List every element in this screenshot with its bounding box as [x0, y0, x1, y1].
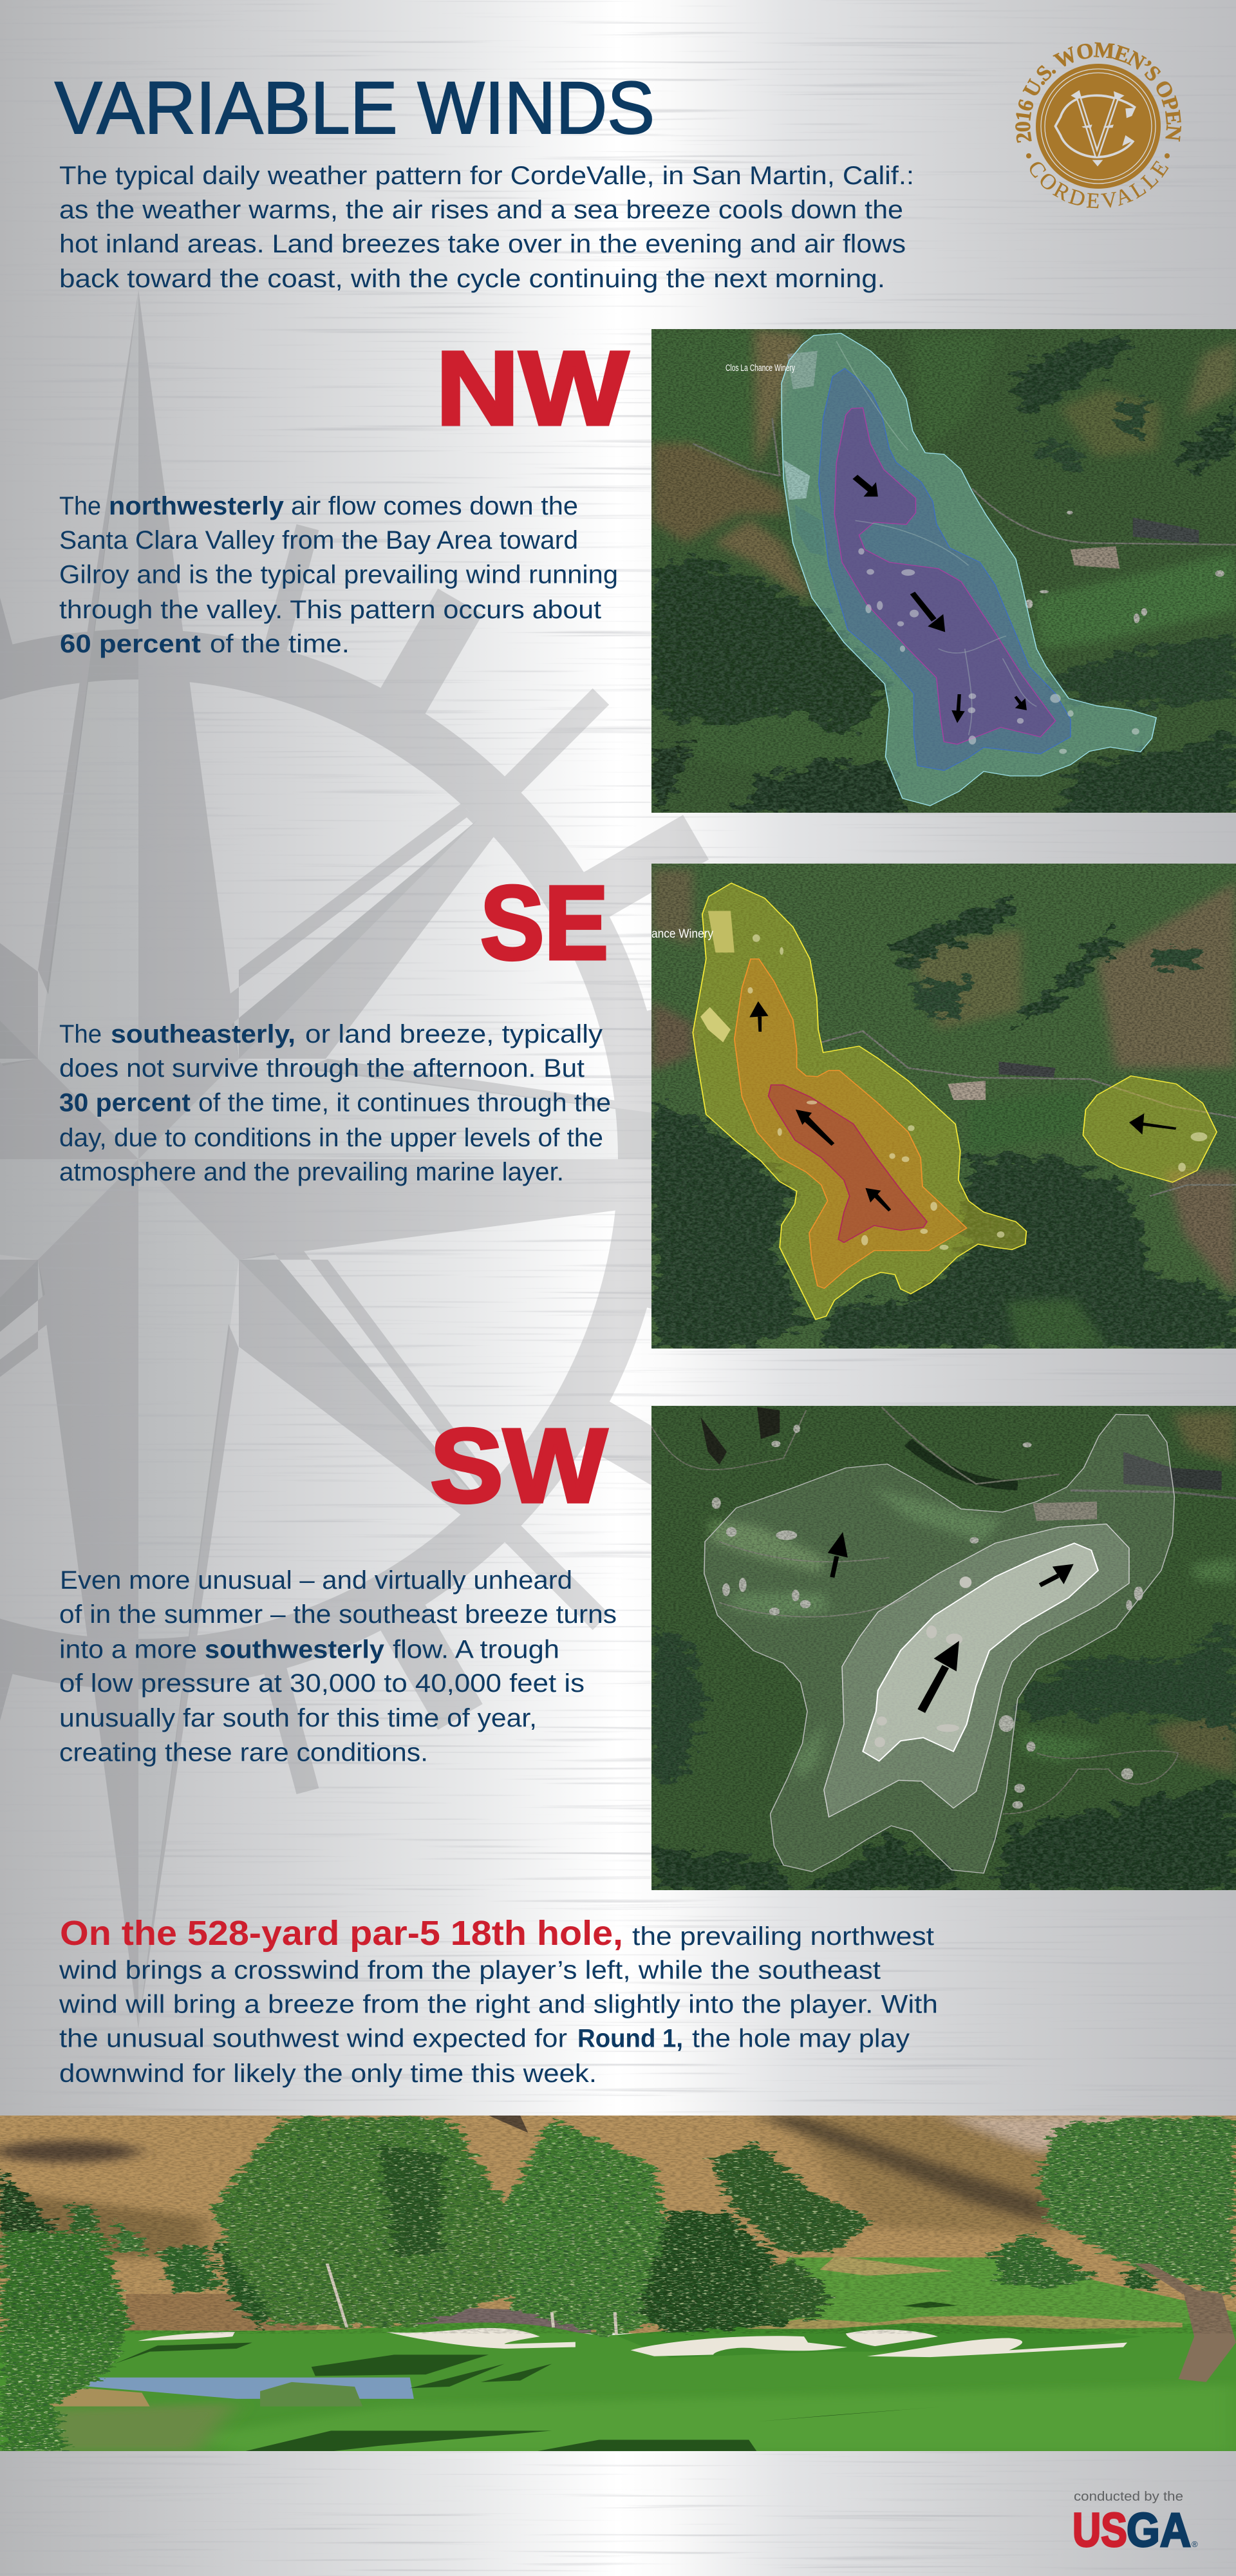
heading: SW: SW [430, 1406, 607, 1524]
wind zone: inner [834, 408, 1056, 744]
intro paragraph [59, 162, 914, 293]
text block: SE [59, 1020, 611, 1186]
text block: NW [59, 492, 618, 658]
wind zone: outer [704, 1414, 1174, 1873]
logo: conducted by the USGA [1072, 2490, 1198, 2557]
text block: SW [59, 1566, 617, 1767]
panel: SW [59, 1406, 1236, 1893]
text block: NW: The [59, 492, 101, 520]
text block: SE: southeasterly, [111, 1020, 295, 1048]
text block: NW: through the valley. This pattern occurs about [59, 596, 601, 624]
map label: Clos La Chance Winery [726, 363, 795, 374]
wind zone: middle [824, 1524, 1129, 1817]
arrows [828, 1532, 1074, 1713]
closing paragraph: 18th hole: On the 528-yard par-5 18th hole, [60, 1914, 623, 1953]
wind zone: outer [782, 333, 1156, 806]
intro paragraph: back toward the coast, with the cycle continuing the next morning. [59, 265, 885, 293]
text block: SE: atmosphere and the prevailing marine layer. [59, 1158, 564, 1186]
USGA wordmark: GA [1127, 2503, 1191, 2557]
map: SE wind zones [651, 864, 1236, 1350]
course lines and bunkers under overlay [836, 341, 1139, 754]
heading: NW: NW [436, 329, 628, 447]
text block: SW: into a more [59, 1636, 197, 1664]
text block: SE: does not survive through the afternoon. But [59, 1054, 585, 1083]
logo: 2016 U.S. Women's Open CordeValle seal [1011, 38, 1186, 213]
text block: NW: of the time. [210, 630, 350, 658]
arrows [749, 1001, 1176, 1211]
text block: SE: or land breeze, typically [305, 1020, 603, 1048]
closing paragraph: 18th hole: downwind for likely the only time this week. [59, 2060, 597, 2088]
caption: conducted by the [1074, 2490, 1183, 2504]
USGA wordmark: US [1072, 2503, 1127, 2557]
wind zone: middle [819, 368, 1071, 770]
text block: SE: day, due to conditions in the upper levels of the [59, 1124, 603, 1152]
closing paragraph: 18th hole: the unusual southwest wind expected for [59, 2025, 567, 2053]
seal disc [1036, 64, 1161, 189]
wind zone: yellow [693, 883, 1217, 1320]
closing paragraph: 18th hole: the prevailing northwest [632, 1922, 934, 1951]
text block: SW: of in the summer – the southeast breeze turns [59, 1600, 617, 1629]
closing paragraph: 18th hole: the hole may play [692, 2025, 910, 2053]
text block: NW: Gilroy and is the typical prevailing wind running [59, 560, 618, 589]
text block: SE: The [59, 1020, 102, 1048]
text block: SW: flow. A trough [393, 1636, 559, 1664]
title: VARIABLE WINDS [55, 67, 655, 149]
closing paragraph: 18th hole: wind will bring a breeze from the right and slightly into the player. With [59, 1990, 938, 2018]
text block: NW: air flow comes down the [291, 492, 578, 520]
map label: ance Winery [651, 927, 713, 941]
bunkers inside inner zone [874, 1577, 971, 1747]
text block: SW: creating these rare conditions. [59, 1739, 428, 1767]
map: SW wind zones [651, 1406, 1236, 1893]
text block: SW: Even more unusual – and virtually unheard [60, 1566, 572, 1595]
USGA wordmark: ® [1192, 2539, 1198, 2549]
text block: SE: of the time, it continues through the [198, 1088, 611, 1117]
seal dots [1026, 153, 1170, 158]
wind zone: red [769, 1085, 927, 1242]
seal bottom text: CORDEVALLE [1030, 160, 1169, 209]
intro paragraph: hot inland areas. Land breezes take over in the evening and air flows [59, 230, 906, 258]
panel: NW [59, 329, 1236, 816]
text block: NW: 60 percent [60, 630, 201, 658]
text block: NW: northwesterly [109, 492, 285, 520]
panel: SE [59, 864, 1236, 1350]
USGA wordmark [1072, 2503, 1198, 2557]
text block: SW: of low pressure at 30,000 to 40,000 feet is [59, 1669, 585, 1698]
intro paragraph: as the weather warms, the air rises and a sea breeze cools down the [59, 196, 903, 224]
intro paragraph: The typical daily weather pattern for CordeValle, in San Martin, Calif.: [59, 162, 914, 190]
CV monogram [1055, 90, 1136, 166]
text block: SE: 30 percent [59, 1088, 191, 1117]
closing paragraph: 18th hole: Round 1, [577, 2025, 683, 2053]
photo: 18th hole at CordeValle [0, 2115, 1236, 2451]
wind zone: orange [735, 959, 967, 1289]
heading: SE: SE [480, 864, 608, 981]
text block: SW: southwesterly [205, 1636, 385, 1664]
seal top text: 2016 U.S. WOMEN’S OPEN [1015, 43, 1182, 143]
wind zone: inner [863, 1543, 1098, 1761]
text block: SW: unusually far south for this time of year, [59, 1704, 537, 1732]
closing paragraph: 18th hole [59, 1914, 938, 2088]
compass rose watermark [0, 290, 1007, 2029]
text block: NW: Santa Clara Valley from the Bay Area toward [59, 526, 578, 554]
bunkers under overlay [747, 934, 1207, 1250]
closing paragraph: 18th hole: wind brings a crosswind from the player’s left, while the southeast [59, 1956, 881, 1985]
arrows [852, 475, 1027, 723]
map: NW wind zones [651, 329, 1236, 816]
seal rings [1041, 69, 1156, 184]
